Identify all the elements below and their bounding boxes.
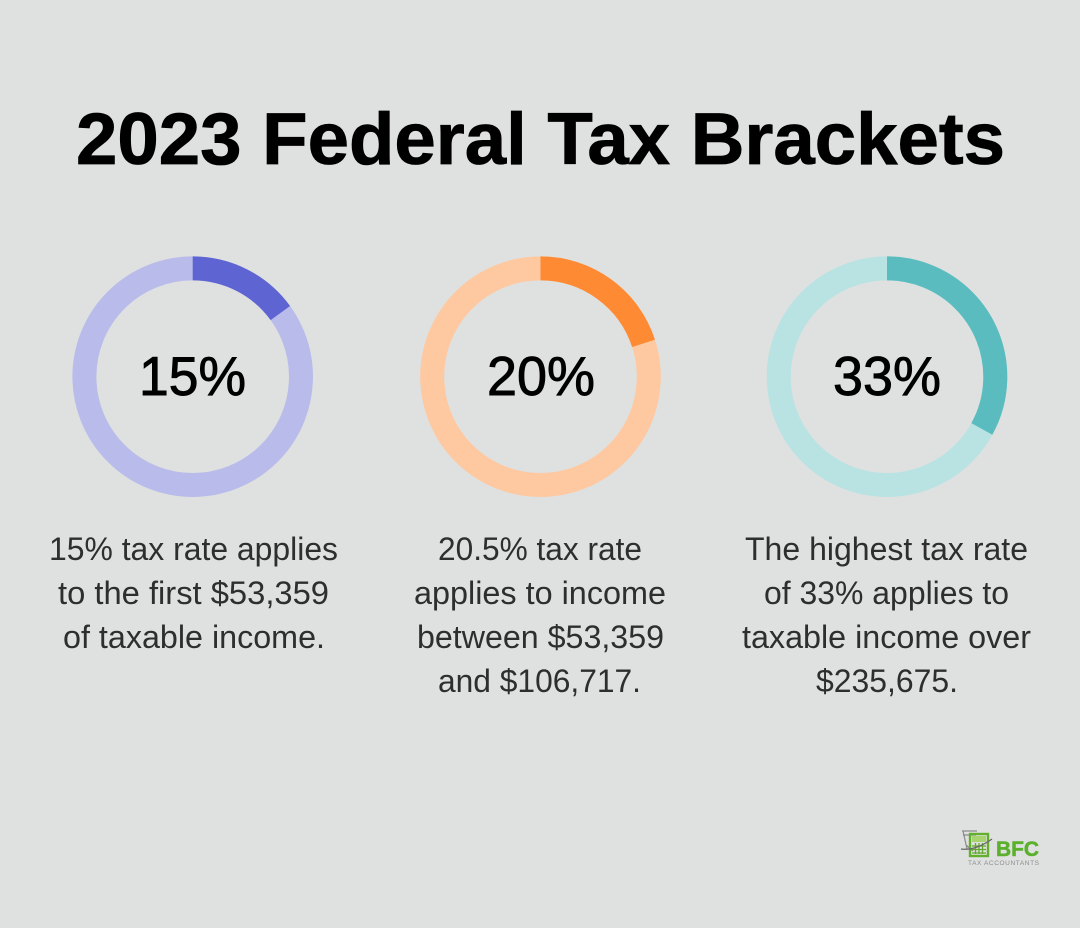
description: 20% bracket: applies to income: [414, 575, 666, 611]
panel: 33% bracket: [742, 268, 1031, 699]
value: 33%: 33%: [833, 345, 941, 407]
logo tagline: TAX ACCOUNTANTS: [968, 860, 1040, 867]
donut chart: 33%: [779, 268, 995, 485]
description: 15% bracket: 15% tax rate applies: [49, 531, 338, 567]
description: 15% bracket: of taxable income.: [63, 619, 325, 655]
description: 20% bracket: between $53,359: [417, 619, 664, 655]
description: 15% bracket: [49, 531, 338, 655]
description: 33% bracket: The highest tax rate: [745, 531, 1028, 567]
title: 2023 Federal Tax Brackets: [76, 99, 1005, 180]
value: 15%: 15%: [139, 345, 246, 407]
donut chart: 15%: [84, 268, 301, 485]
description: 20% bracket: [414, 531, 666, 699]
description: 20% bracket: and $106,717.: [438, 663, 641, 699]
icon: calculator with papers: [961, 831, 992, 856]
value: 20%: 20%: [487, 345, 595, 407]
description: 33% bracket: $235,675.: [816, 663, 958, 699]
panel: 20% bracket: [414, 268, 666, 699]
description: 33% bracket: of 33% applies to: [764, 575, 1009, 611]
logo: BFC Tax Accountants: [961, 831, 1040, 867]
description: 33% bracket: [742, 531, 1031, 699]
description: 20% bracket: 20.5% tax rate: [438, 531, 642, 567]
description: 15% bracket: to the first $53,359: [58, 575, 329, 611]
description: 33% bracket: taxable income over: [742, 619, 1031, 655]
donut chart: 20%: [432, 268, 649, 485]
panel: 15% bracket: [49, 268, 338, 655]
logo wordmark: BFC: [996, 838, 1039, 861]
